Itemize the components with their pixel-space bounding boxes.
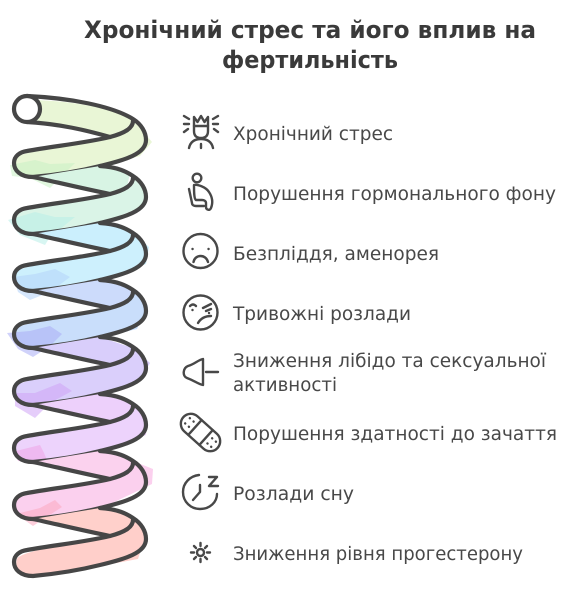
label: reduced libido: активності xyxy=(233,374,337,396)
label: impaired conception: Порушення здатності до зачаття xyxy=(233,423,557,445)
title: Хронічний стрес та його вплив на xyxy=(84,16,536,44)
coil band 5 xyxy=(14,337,150,418)
label: hormonal disorder: Порушення гормонального фону xyxy=(233,183,556,205)
spring coil xyxy=(7,96,153,576)
icon: seated person xyxy=(189,174,212,210)
coil band 6 xyxy=(14,394,147,467)
label: chronic stress: Хронічний стрес xyxy=(233,123,393,145)
coil band 7 xyxy=(14,451,153,526)
title xyxy=(84,16,536,74)
label: sleep disorders: Розлади сну xyxy=(233,483,354,505)
icon: angry face xyxy=(184,296,218,330)
icon: stressed head with crown xyxy=(184,116,218,148)
icon: muted speaker xyxy=(184,359,218,385)
icon: sad face xyxy=(184,234,218,268)
icon: bandage xyxy=(177,410,224,455)
coil band 8 xyxy=(14,508,146,576)
coil band 4 xyxy=(7,280,148,357)
label: reduced progesterone: Зниження рівня прогестерону xyxy=(233,543,523,565)
coil band 3 xyxy=(13,223,149,300)
icon: sun xyxy=(191,543,210,562)
coil band 2 xyxy=(8,166,146,245)
title: фертильність xyxy=(222,46,398,74)
label: infertility, amenorrhea: Безпліддя, аменорея xyxy=(233,243,439,265)
coil band 1: top cap xyxy=(10,96,152,188)
label: anxiety disorders: Тривожні розлади xyxy=(232,303,411,325)
icon: clock with Z xyxy=(183,475,218,509)
label: reduced libido: Зниження лібідо та сексуальної xyxy=(233,350,547,372)
